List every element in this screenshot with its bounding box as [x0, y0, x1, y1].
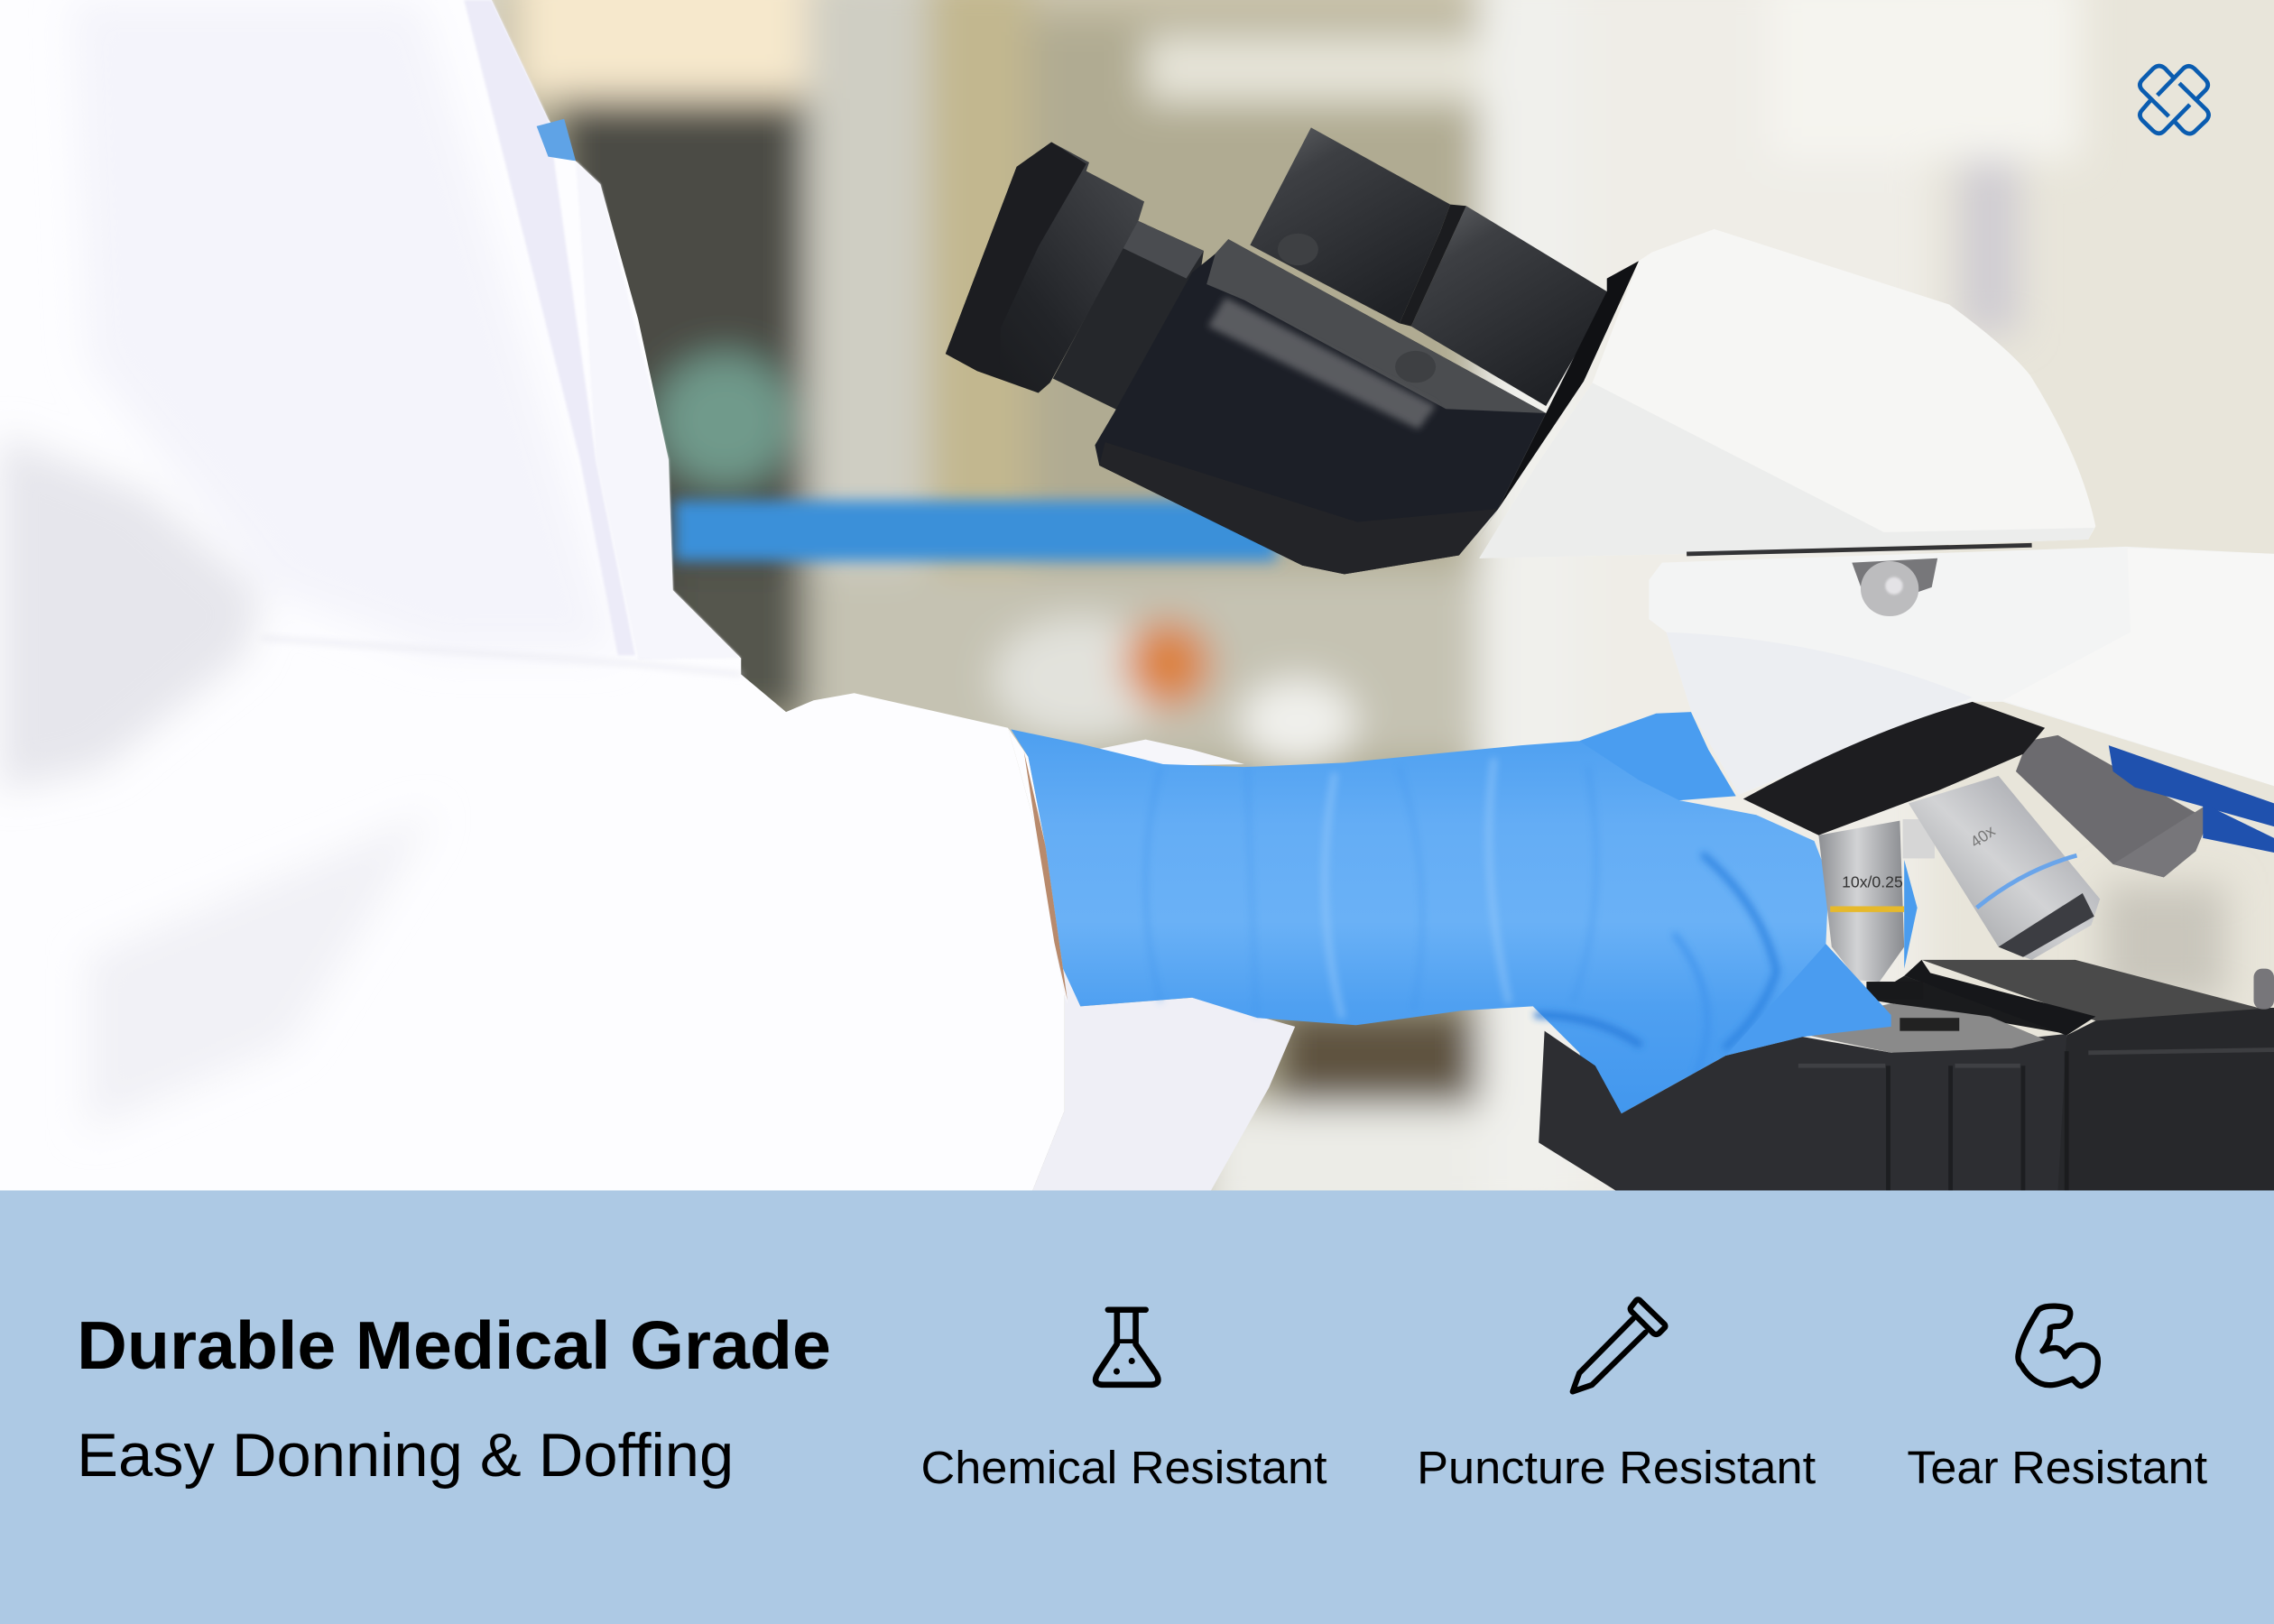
feature: chemical resistant — [921, 1310, 1327, 1493]
label: Puncture Resistant — [1417, 1442, 1816, 1493]
glove — [1008, 712, 1891, 1113]
photo: gloved hand at microscope — [0, 0, 2274, 1221]
icon: flask — [1095, 1310, 1158, 1385]
lab coat — [0, 0, 1065, 1190]
stage — [1539, 960, 2274, 1190]
subtitle: Easy Donning & Doffing — [77, 1422, 734, 1490]
logo: crossed bandage mark — [2140, 66, 2209, 134]
feature: puncture resistant — [1417, 1299, 1816, 1493]
label: Chemical Resistant — [921, 1442, 1327, 1493]
microscope — [946, 127, 2274, 1190]
front eyepiece and body — [946, 143, 1546, 574]
objectives — [1743, 702, 2274, 982]
white head — [1479, 229, 2095, 558]
white arm — [1649, 545, 2274, 795]
rear eyepiece — [1250, 127, 1607, 406]
collar — [1478, 261, 1639, 540]
blue pen in pocket — [537, 119, 576, 161]
gloved fingertip over stage — [1725, 944, 1891, 1056]
lower sleeve behind glove — [1032, 950, 1295, 1190]
icon: flexed arm — [2018, 1306, 2098, 1386]
objectives: 40x — [1967, 822, 1999, 851]
feature: tear resistant — [1907, 1306, 2207, 1493]
objectives: 10x/0.25 — [1842, 873, 1903, 891]
label: Tear Resistant — [1907, 1442, 2207, 1493]
bottom panel — [0, 1190, 2274, 1624]
icon: nail — [1573, 1299, 1665, 1391]
title: Durable Medical Grade — [77, 1307, 831, 1383]
blurred laboratory background — [492, 0, 2274, 1191]
